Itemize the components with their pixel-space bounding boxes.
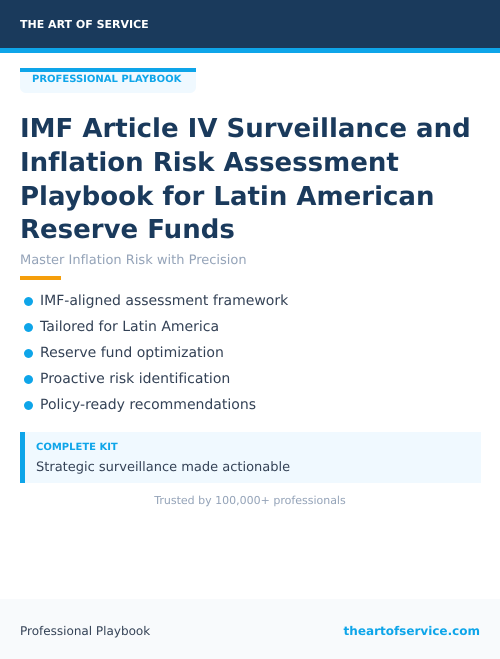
title: Playbook for Latin American: [20, 182, 434, 212]
feature 4: Proactive risk identification: [40, 371, 230, 387]
feature 1: IMF-aligned assessment framework: [40, 293, 288, 309]
brand name: THE ART OF SERVICE: [20, 18, 149, 31]
callout text: Strategic surveillance made actionable: [36, 460, 290, 475]
feature 2: Tailored for Latin America: [40, 319, 219, 335]
title: [20, 114, 471, 245]
badge top bar: [20, 68, 196, 72]
header accent stripe: [0, 48, 500, 53]
footer: [0, 599, 500, 659]
trust line: Trusted by 100,000+ professionals: [154, 494, 346, 507]
title: IMF Article IV Surveillance and: [20, 114, 471, 144]
header band: [0, 0, 500, 53]
subtitle: Master Inflation Risk with Precision: [20, 253, 247, 268]
feature list: [24, 293, 288, 413]
title: Reserve Funds: [20, 215, 235, 245]
callout label: COMPLETE KIT: [36, 442, 118, 453]
badge label: PROFESSIONAL PLAYBOOK: [32, 74, 181, 85]
callout: complete kit: [20, 432, 481, 483]
feature 5: Policy-ready recommendations: [40, 397, 256, 413]
callout left bar: [20, 432, 25, 483]
feature 3: Reserve fund optimization: [40, 345, 224, 361]
footer url: theartofservice.com: [344, 624, 480, 638]
badge: [20, 68, 196, 93]
footer label: Professional Playbook: [20, 624, 150, 638]
title: Inflation Risk Assessment: [20, 148, 399, 178]
accent bar: [20, 276, 61, 280]
